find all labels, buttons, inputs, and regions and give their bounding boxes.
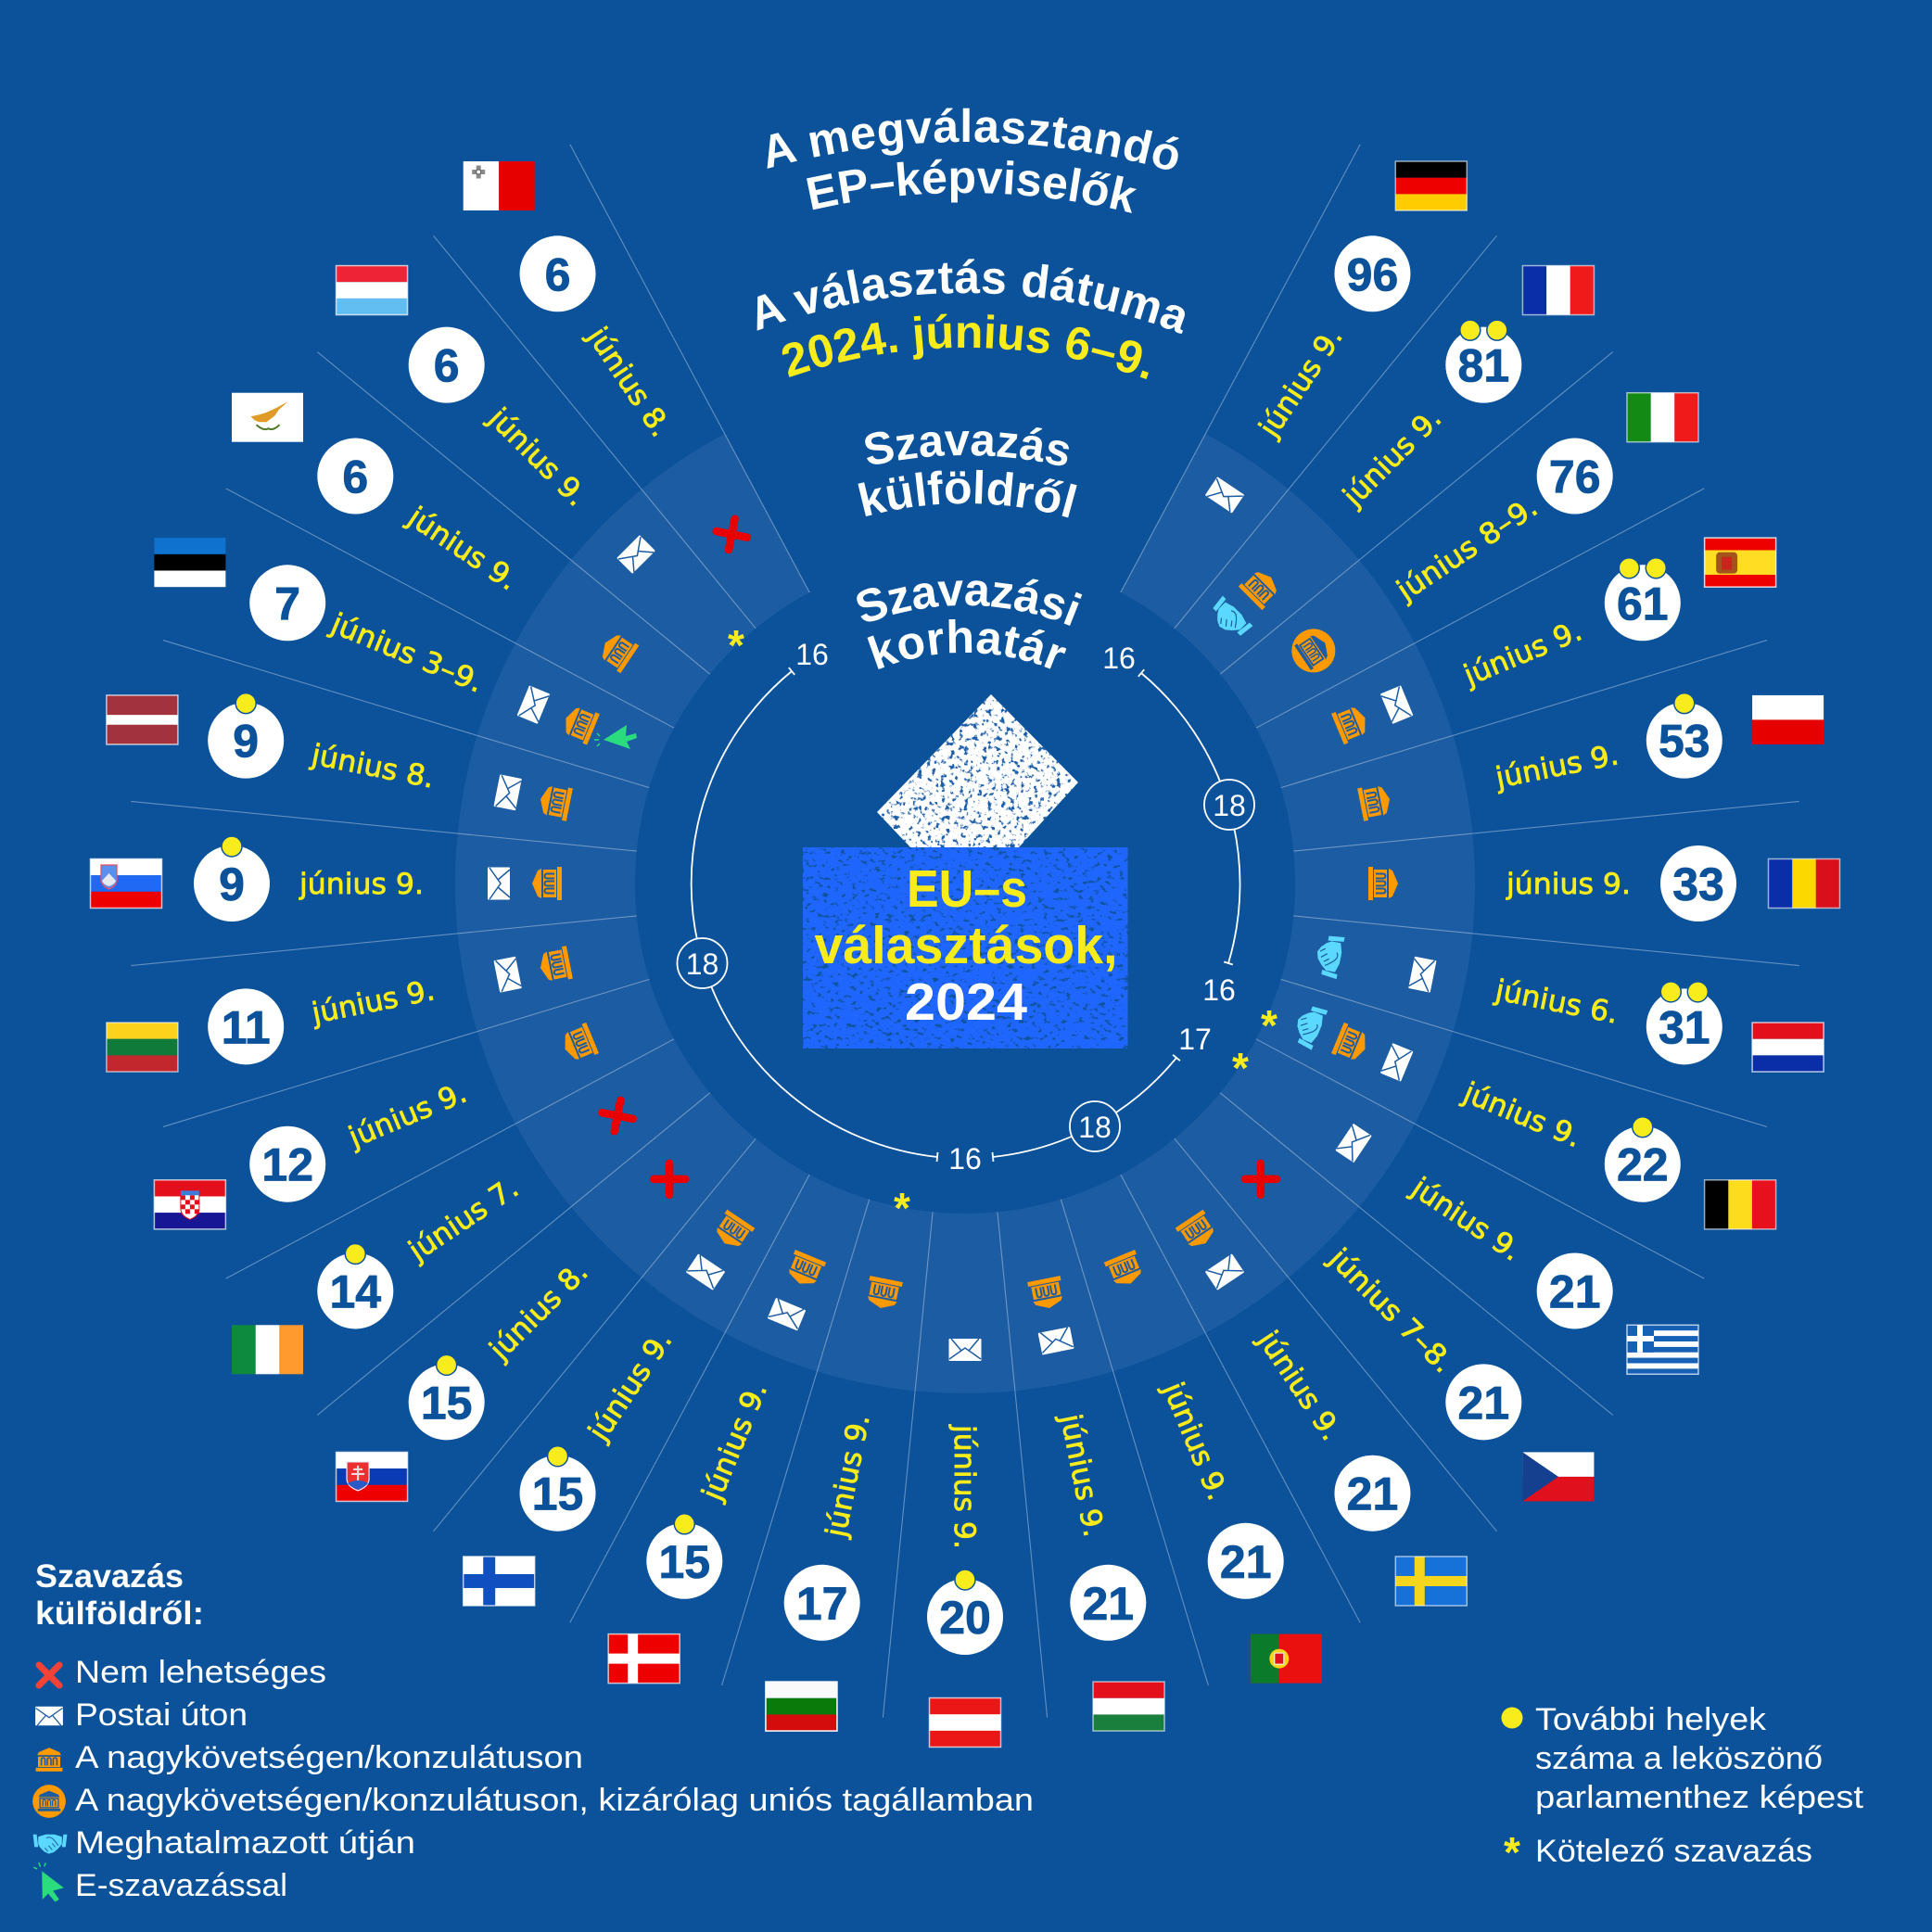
election dates: június 8–9. [1391, 490, 1544, 608]
election dates: június 9. [581, 1325, 679, 1447]
bubble: Poland 53 [1646, 693, 1722, 779]
flag: Croatia [154, 1180, 225, 1229]
heading: voting age: Szavazási [857, 578, 1083, 626]
flag: Ireland [232, 1325, 303, 1374]
legend: by proxy: Meghatalmazott útján [75, 1825, 415, 1861]
bubble: Latvia 9 [208, 693, 284, 779]
election dates: június 9. [1492, 738, 1621, 795]
voting age ring: 18 [1078, 1111, 1112, 1144]
bubble: Netherlands 31: 31 [1659, 1001, 1710, 1053]
bubble: Spain 61: 61 [1617, 578, 1669, 629]
voting-from-abroad icons [488, 477, 1437, 1361]
bubble: Sweden 21: 21 [1347, 1468, 1398, 1520]
bubble: Croatia 12: 12 [261, 1139, 313, 1191]
bubble: Romania 33: 33 [1672, 858, 1724, 910]
bubble: Croatia 12 [249, 1126, 325, 1202]
bubble: Estonia 7 [249, 565, 325, 641]
ballot box title: 2024 [905, 972, 1027, 1032]
bubble: Malta 6: 6 [545, 248, 570, 300]
voting age ring [677, 638, 1254, 1176]
heading: election date [756, 259, 1185, 379]
bubble: Malta 6 [520, 235, 596, 311]
flag: Denmark [608, 1634, 680, 1684]
bubble: Latvia 9: 9 [233, 716, 259, 768]
election dates: június 3–9. [325, 606, 488, 700]
bubble: Bulgaria 17: 17 [796, 1578, 847, 1630]
legend: compulsory voting [1504, 1828, 1812, 1876]
flag: Slovenia [91, 858, 161, 909]
heading: seats to be elected: EP–képviselők [807, 159, 1137, 213]
election dates: június 9. [308, 973, 438, 1031]
legend: additional seats [1502, 1702, 1864, 1815]
bubble: Greece 21: 21 [1549, 1265, 1601, 1317]
heading: voting from abroad [858, 427, 1077, 517]
legend: additional seats: parlamenthez képest [1535, 1780, 1864, 1815]
bubble: Austria 20: 20 [939, 1592, 991, 1644]
legend: additional seats: További helyek [1535, 1702, 1767, 1737]
flag: Finland [464, 1557, 535, 1606]
bubble: France 81 [1445, 320, 1521, 403]
compulsory voting asterisks: * [1232, 1044, 1249, 1092]
heading: election date: 2024. június 6–9. [782, 313, 1149, 379]
ballot paper [877, 694, 1078, 847]
flag: Czechia [1522, 1452, 1594, 1501]
bubble: Netherlands 31 [1646, 982, 1722, 1064]
heading: voting age: korhatár [868, 619, 1066, 669]
election dates: június 8. [483, 1255, 594, 1367]
bubble: Luxembourg 6 [409, 327, 485, 403]
bubble: Denmark 15: 15 [658, 1536, 710, 1588]
ballot box [803, 847, 1127, 1049]
bubble: Portugal 21: 21 [1220, 1536, 1272, 1588]
flag: Luxembourg [337, 266, 408, 315]
bubble: Finland 15: 15 [532, 1468, 583, 1520]
election dates: június 9. [1156, 1377, 1234, 1506]
election dates: június 9. [1251, 1324, 1348, 1447]
bubble: Bulgaria 17 [784, 1565, 860, 1641]
ring band: voting from abroad [455, 434, 1475, 1393]
voting age ring: 16 [1202, 973, 1236, 1007]
bubble: Czechia 21 [1445, 1364, 1521, 1440]
bubble: Spain 61 [1605, 558, 1681, 641]
bubble: Ireland 14 [317, 1243, 393, 1328]
flag: Greece [1627, 1325, 1698, 1374]
heading: voting from abroad: Szavazás [865, 427, 1069, 465]
election dates: június 9. [947, 1424, 981, 1549]
flag: Slovakia [337, 1452, 408, 1501]
bubble: Finland 15 [520, 1446, 596, 1532]
ballot box title: EU–s [907, 859, 1027, 919]
heading: voting age [857, 578, 1083, 669]
flag: Portugal [1251, 1634, 1322, 1684]
legend heading: Szavazás [35, 1558, 184, 1595]
bubble: Ireland 14: 14 [329, 1265, 381, 1317]
bubble: France 81: 81 [1458, 340, 1509, 392]
legend: compulsory voting: Kötelező szavazás [1535, 1834, 1812, 1869]
flag: Poland [1752, 695, 1824, 744]
bubble: Poland 53: 53 [1659, 716, 1710, 768]
voting age ring: 16 [948, 1142, 982, 1176]
bubble: Italy 76: 76 [1549, 451, 1601, 503]
legend: at embassy or consulate: A nagykövetségen/konzulátuson [75, 1740, 583, 1775]
bubble: Romania 33 [1660, 845, 1736, 922]
heading: voting from abroad: külföldről [858, 469, 1077, 517]
bubble: Cyprus 6: 6 [342, 451, 368, 503]
election dates: június 9. [1506, 868, 1631, 901]
legend: e-voting [30, 1857, 287, 1906]
flag: Romania [1769, 858, 1839, 909]
bubble: Slovenia 9: 9 [219, 858, 245, 910]
heading: election date: A választás dátuma [756, 259, 1185, 334]
election dates: június 9. [401, 500, 524, 597]
legend: compulsory voting: * [1504, 1828, 1520, 1876]
bubble: Portugal 21 [1208, 1523, 1284, 1599]
bubble: Italy 76 [1537, 439, 1613, 515]
flag: Spain [1705, 538, 1776, 587]
bubble: Hungary 21 [1070, 1565, 1146, 1641]
election dates: június 9. [1252, 322, 1350, 444]
election dates: június 7. [402, 1171, 525, 1268]
bubble: Austria 20 [927, 1570, 1003, 1655]
election dates: június 9. [343, 1076, 472, 1155]
flag: Cyprus [232, 393, 303, 442]
election dates: június 9. [820, 1411, 877, 1541]
bubble: Belgium 22 [1605, 1117, 1681, 1202]
election dates: június 9. [1405, 1171, 1527, 1268]
legend: voting from abroad [30, 1558, 1034, 1906]
election dates: június 8. [308, 738, 438, 795]
election dates: június 9. [481, 401, 593, 513]
election dates: június 7–8. [1322, 1241, 1460, 1379]
bubble: Lithuania 11: 11 [222, 1001, 271, 1053]
election dates: június 9. [1053, 1410, 1111, 1540]
ballot box title: választások, [814, 916, 1118, 975]
voting age ring: 18 [686, 947, 718, 981]
bubble: Czechia 21: 21 [1458, 1377, 1509, 1429]
election dates [299, 321, 1631, 1549]
bubble: Germany 96: 96 [1347, 248, 1398, 300]
seat count bubbles [194, 235, 1736, 1655]
bubble: Luxembourg 6: 6 [434, 340, 460, 392]
bubble: Sweden 21 [1334, 1455, 1410, 1532]
bubble: Hungary 21: 21 [1083, 1578, 1134, 1630]
voting age ring: 18 [1213, 789, 1246, 822]
bubble: Denmark 15 [646, 1514, 722, 1599]
flag: Hungary [1093, 1682, 1164, 1731]
voting age ring: 16 [795, 638, 829, 671]
legend heading [35, 1558, 204, 1632]
legend: e-voting: E-szavazással [75, 1868, 287, 1903]
voting age ring: 16 [1102, 642, 1136, 675]
compulsory voting asterisks: * [894, 1184, 910, 1232]
compulsory voting asterisks: * [728, 621, 744, 669]
legend: by post: Postai úton [75, 1697, 248, 1733]
election dates: június 6. [1492, 973, 1621, 1031]
flag: Belgium [1705, 1180, 1776, 1229]
bubble: Belgium 22: 22 [1617, 1139, 1669, 1191]
legend heading: külföldről: [35, 1595, 204, 1632]
flag: Austria [929, 1698, 1001, 1747]
flag: Estonia [154, 538, 225, 587]
flag: Netherlands [1752, 1023, 1824, 1072]
flag: Germany [1395, 161, 1467, 210]
voting age ring: 17 [1178, 1023, 1212, 1056]
flag: Bulgaria [766, 1682, 837, 1731]
election dates: június 8. [580, 321, 678, 443]
heading: seats to be elected: A megválasztandó [768, 108, 1179, 170]
election dates: június 9. [299, 868, 424, 901]
compulsory voting asterisks: * [1261, 1001, 1277, 1049]
bubble: Slovenia 9 [194, 836, 270, 922]
bubble: Cyprus 6 [317, 439, 393, 515]
flag: Sweden [1395, 1557, 1467, 1606]
flag: Italy [1627, 393, 1698, 442]
election dates: június 9. [1336, 401, 1448, 514]
election dates: június 9. [695, 1378, 774, 1506]
bubble: Slovakia 15: 15 [421, 1377, 472, 1429]
election dates: június 9. [1458, 615, 1587, 693]
bubble: Greece 21 [1537, 1252, 1613, 1328]
election dates: június 9. [1457, 1075, 1586, 1154]
flag: Lithuania [107, 1023, 178, 1072]
ballot box title [814, 859, 1118, 1032]
compulsory voting asterisks [728, 621, 1277, 1232]
legend: not possible: Nem lehetséges [75, 1655, 326, 1690]
bubble: Lithuania 11 [208, 988, 284, 1064]
bubble: Slovakia 15 [409, 1354, 485, 1440]
bubble: Estonia 7: 7 [274, 578, 300, 629]
flag: Malta [464, 161, 535, 210]
flag: Latvia [107, 695, 178, 744]
bubble: Germany 96 [1334, 235, 1410, 311]
flag: France [1522, 266, 1594, 315]
legend: additional seats: száma a leköszönő [1535, 1741, 1823, 1776]
flags [91, 161, 1839, 1747]
heading: seats to be elected [768, 108, 1179, 213]
legend: at embassy, EU member states only: A nagykövetségen/konzulátuson, kizárólag uniós tagállamban [75, 1783, 1034, 1818]
